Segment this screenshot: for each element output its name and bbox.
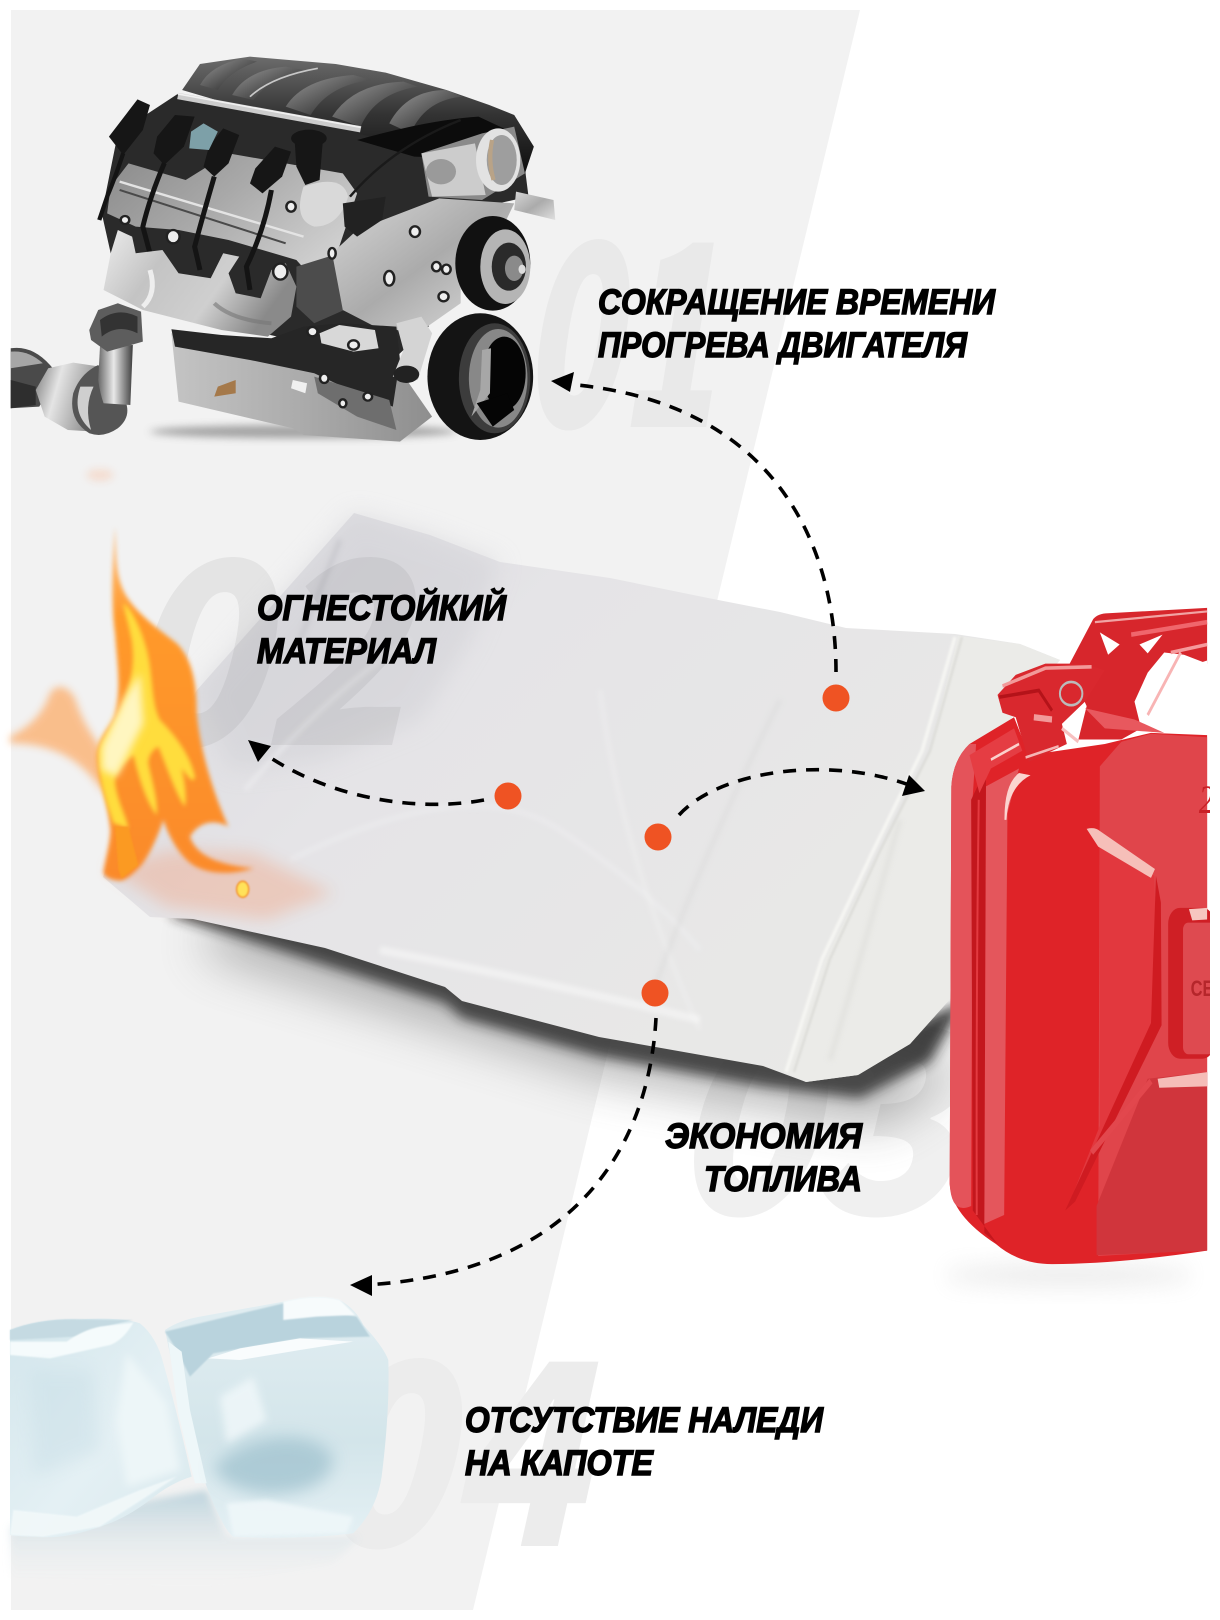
watermark number 01: 01	[520, 133, 716, 501]
front bevel pink	[984, 769, 1019, 1224]
ice cubes	[10, 1297, 389, 1590]
engine ground shadow	[150, 425, 457, 438]
upper pulley	[455, 216, 530, 311]
throttle body	[350, 120, 555, 220]
bolt holes	[121, 202, 451, 407]
left side pink face	[950, 744, 976, 1208]
orange flame body	[96, 527, 253, 881]
arrow: insulation to ice	[350, 1018, 656, 1296]
lower dark block band	[171, 323, 400, 407]
label: no ice on hood	[465, 1401, 824, 1483]
shadow far spread	[200, 910, 960, 1125]
marker dot: ice	[642, 980, 668, 1006]
arrow: insulation to engine	[551, 372, 836, 672]
lower flame	[115, 827, 138, 878]
sheet body	[103, 513, 1060, 1082]
right lighter face	[1098, 734, 1207, 1256]
water pump neck	[320, 317, 432, 383]
watermark number 03: 03	[668, 920, 977, 1288]
label: engine warm-up: ПРОГРЕВА ДВИГАТЕЛЯ	[598, 326, 968, 365]
dark engine mass behind parts	[102, 93, 529, 360]
label letters on can: 2	[1199, 778, 1214, 822]
marker dot: fire	[494, 782, 522, 810]
fire flame	[10, 469, 333, 920]
inner label recess	[1168, 908, 1214, 1059]
ignition coils	[99, 99, 327, 290]
left ice cube	[10, 1319, 192, 1537]
engine photo	[11, 57, 555, 442]
arrow: insulation to flame	[248, 740, 484, 804]
ice reflection	[10, 1490, 360, 1590]
label: engine warm-up: СОКРАЩЕНИЕ ВРЕМЕНИ	[598, 283, 996, 322]
dark recess under valve cover	[296, 253, 352, 323]
left pale flame wisp	[10, 687, 103, 793]
exhaust catalytic converter	[11, 303, 143, 435]
exhaust manifold	[104, 230, 296, 337]
scorch marks	[107, 850, 333, 920]
jerry can: CE	[1191, 977, 1214, 1002]
darker top-left fold	[197, 513, 500, 770]
lower panel	[1097, 1072, 1207, 1255]
seam band	[971, 769, 998, 1244]
sheet contact shadow	[170, 890, 965, 1098]
yellow flame core	[98, 603, 195, 828]
fuel rail	[178, 96, 361, 129]
white-hot core	[102, 673, 143, 777]
valve cover	[107, 153, 357, 280]
seam	[786, 637, 955, 1072]
label: fire resistant	[257, 587, 507, 671]
label: no ice on hood: НА КАПОТЕ	[465, 1444, 655, 1483]
engine block front	[332, 198, 514, 333]
upper bevel highlight	[970, 728, 1022, 793]
watermark number 02: 02	[118, 451, 422, 819]
intake manifold	[182, 57, 534, 173]
can body	[950, 717, 1207, 1264]
label: fire resistant: МАТЕРИАЛ	[257, 632, 437, 671]
label: fuel economy: ЭКОНОМИЯ	[665, 1117, 863, 1156]
jerry can	[943, 608, 1219, 1286]
label: fuel economy	[665, 1117, 863, 1199]
label: no ice on hood: ОТСУТСТВИЕ НАЛЕДИ	[465, 1401, 824, 1440]
can shadow	[943, 1265, 1194, 1286]
marker dot: engine	[822, 684, 850, 712]
handles	[1068, 608, 1207, 740]
marker dot: fuel	[644, 824, 672, 850]
label: fire resistant: ОГНЕСТОЙКИЙ	[257, 587, 507, 628]
label: fuel economy: ТОПЛИВА	[704, 1160, 862, 1199]
right ice cube	[165, 1297, 389, 1538]
spark	[237, 881, 249, 897]
hood insulation sheet	[103, 513, 1060, 1125]
label: engine warm-up	[598, 283, 996, 365]
oil pan	[171, 333, 432, 442]
faint top wisp	[87, 469, 113, 481]
wrinkles	[245, 540, 900, 1060]
embossed panel	[1076, 848, 1155, 1188]
right of seam strip	[786, 636, 1060, 1082]
arrow: insulation to fuel can	[679, 770, 925, 815]
background panel: grey diagonal	[11, 10, 860, 1610]
filler cap	[998, 664, 1164, 762]
lower crank pulley	[427, 313, 533, 440]
watermark number 04: 04	[310, 1252, 600, 1620]
